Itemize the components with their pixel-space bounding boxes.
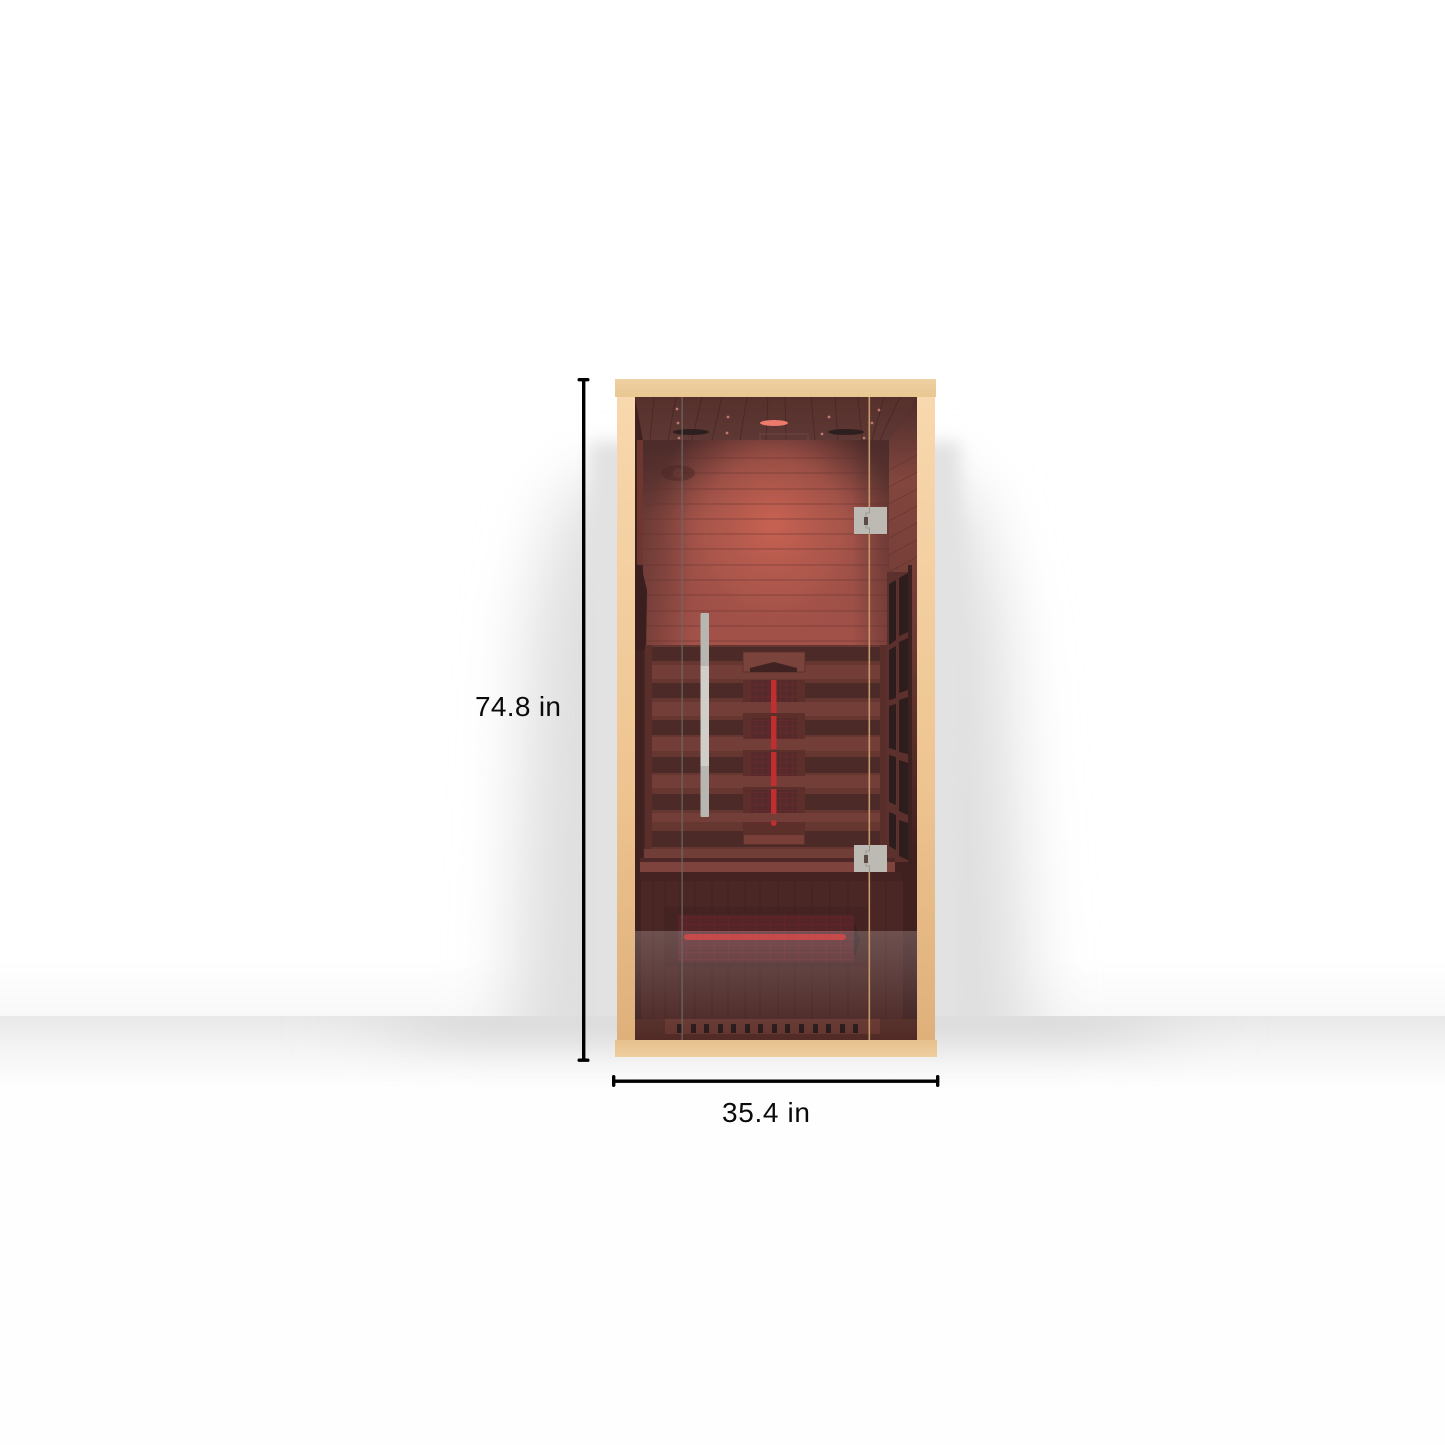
right side window — [887, 565, 912, 865]
background wall — [0, 0, 1445, 1016]
lower panel cap — [744, 835, 804, 844]
glass reflection — [635, 931, 917, 1040]
sauna cabinet — [615, 379, 937, 1057]
back wall — [643, 440, 889, 645]
interior back — [635, 397, 917, 1040]
ceiling — [635, 397, 917, 441]
red heater strip — [771, 680, 776, 826]
upper hinge — [854, 507, 887, 534]
wall shadow — [462, 421, 1080, 1016]
base — [615, 1040, 937, 1057]
lower hinge — [854, 845, 887, 872]
ceiling light — [760, 420, 788, 426]
floor — [0, 1016, 1445, 1071]
lower wall — [641, 881, 903, 1019]
red leg heater bar — [684, 934, 846, 940]
ceiling pin lights — [676, 408, 880, 439]
door edge: right — [868, 397, 870, 1040]
backrest slats — [645, 645, 887, 849]
height label: 74.8 in — [475, 691, 561, 722]
width dimension line — [612, 1075, 939, 1087]
door handle — [700, 613, 709, 817]
top beam — [615, 379, 936, 397]
height dimension line — [578, 378, 590, 1062]
wall sconce — [661, 465, 695, 481]
left side wall — [635, 397, 647, 1040]
leg heater — [665, 907, 870, 967]
floor mat — [635, 1019, 917, 1040]
width label: 35.4 in — [722, 1097, 810, 1128]
headrest — [743, 652, 805, 672]
bench — [640, 849, 902, 881]
right post — [917, 397, 935, 1040]
left post — [617, 397, 635, 1040]
infographic: sauna dimensions — [0, 378, 1445, 1122]
door edge: left — [682, 397, 683, 1040]
right side wall — [887, 397, 917, 1040]
back heater panel — [743, 652, 805, 845]
ceiling speakers — [673, 429, 864, 435]
